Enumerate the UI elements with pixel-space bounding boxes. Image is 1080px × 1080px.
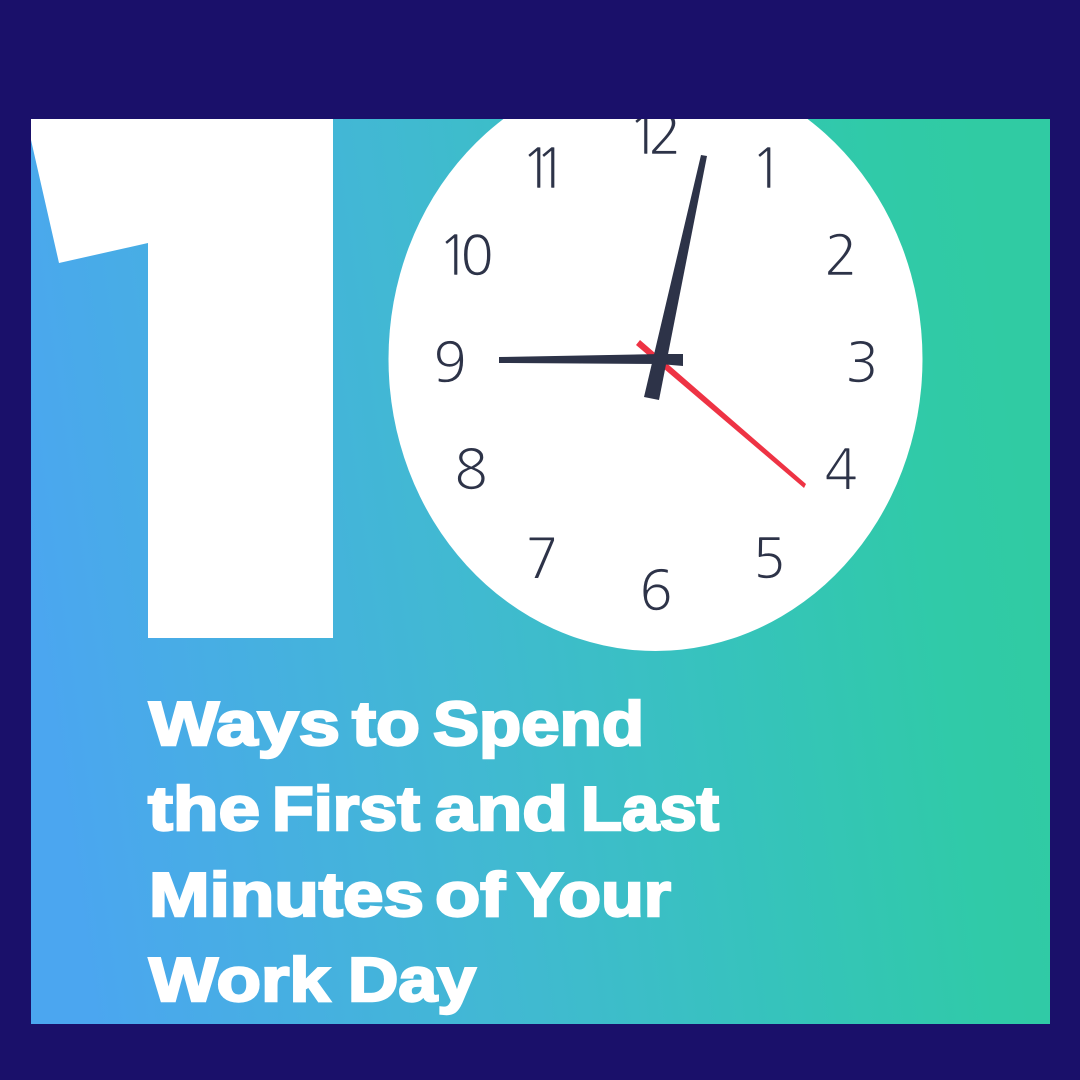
title line 3: of [435,861,505,930]
second hand [636,340,806,488]
clock numbers: 5 [752,531,786,586]
clock numbers: 10 [437,228,494,283]
title line 4: Day [348,946,477,1015]
clock numbers: 12 [627,107,682,162]
clock [388,67,922,651]
title line 4: Work [149,946,331,1015]
title [148,690,719,1015]
clock numbers: 3 [845,335,879,390]
clock numbers: 1 [750,141,784,196]
title line 2: First [272,775,420,844]
clock numbers: 6 [639,563,673,618]
title line 2: Last [581,775,719,844]
title line 2: and [435,775,568,844]
title line 1: Ways [149,690,340,759]
title line 3: Minutes [149,861,424,930]
clock numbers: 11 [520,141,568,196]
clock numbers: 2 [824,228,858,283]
title line 3: Your [517,861,671,930]
clock numbers: 9 [433,335,467,390]
infographic poster [31,119,1050,1024]
panel: gradient background [31,119,1050,1024]
title line 2: the [148,775,260,844]
minute hand [644,155,707,400]
clock numbers: 8 [454,442,488,497]
clock numbers: 7 [525,531,559,586]
numeral one [31,119,333,638]
clock face [388,67,922,651]
title line 1: Spend [433,690,644,759]
clock numbers: 4 [824,442,858,497]
title line 1: to [352,690,420,759]
hour hand [499,354,683,366]
clock numbers [433,107,879,618]
